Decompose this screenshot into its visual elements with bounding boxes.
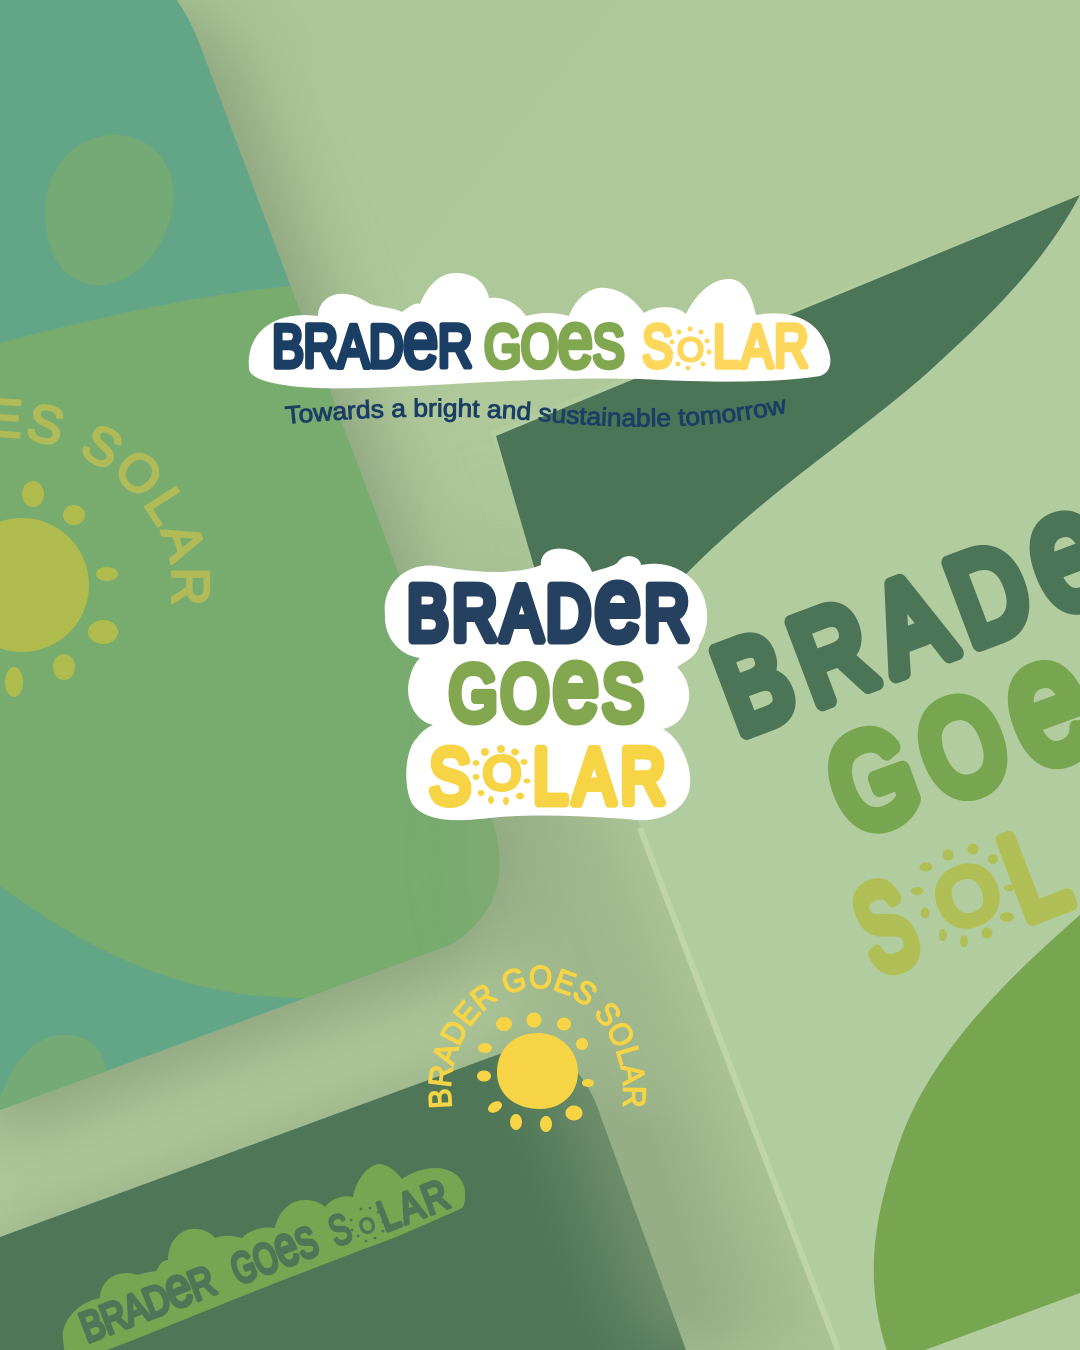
logo text: solar o: O [677,331,704,368]
logo text: solar s: S [642,313,673,380]
spine highlight [640,828,838,1350]
bottom wordmark: goes: GOeS [220,1205,326,1297]
bottom wordmark: solar s: S [322,1204,358,1256]
blob: lower bump [0,1035,106,1110]
book flap: dark green triangle [496,195,1080,620]
book big wordmark [685,415,1080,1000]
bottom wordmark: brader: BRADeR [68,1244,222,1350]
book word: solar s: S [837,854,934,1000]
stacked text: solar lar: LAR [533,732,671,820]
bottom cloud wordmark [63,1164,465,1350]
stacked text: goes: GOeS [449,626,647,742]
shadow: book spine [480,480,810,1350]
logo text: goes: GOeS [484,295,624,385]
icon: faded sun [0,481,118,697]
blob: large green shape [0,285,520,998]
icon: sun [477,1012,594,1132]
shadow: left card [0,0,523,1140]
panel: left teal card [0,0,500,1110]
logo text: brader: BRADeR [272,295,472,385]
panel: right book cover [490,195,1080,1350]
bottom wordmark: solar o: O [355,1211,379,1240]
panel: bottom dark card [0,1049,686,1350]
logo text: solar lar: LAR [713,313,810,380]
icon: bottom sun rays [350,1207,384,1242]
icon: stacked sun rays [472,745,530,805]
stacked text: brader: BRADeR [407,546,693,662]
book blob: lower right [874,915,1080,1350]
logo: horizontal cloud [249,273,830,388]
icon: mini sun rays [668,326,712,370]
book word: solar o: O [923,844,1012,948]
stacked text: solar o: O [483,747,521,799]
blob: upper oval [45,135,174,285]
shadow: bottom card [0,1030,740,1350]
logo: stacked cloud [385,546,707,820]
tagline: Towards a bright and sustainable tomorrow [284,398,786,428]
stacked text: solar s: S [429,732,471,820]
bottom wordmark: solar lar: LAR [372,1170,458,1241]
circular badge: BRADER GOES SOLAR [428,965,646,1108]
icon: book sun rays [911,844,1014,947]
